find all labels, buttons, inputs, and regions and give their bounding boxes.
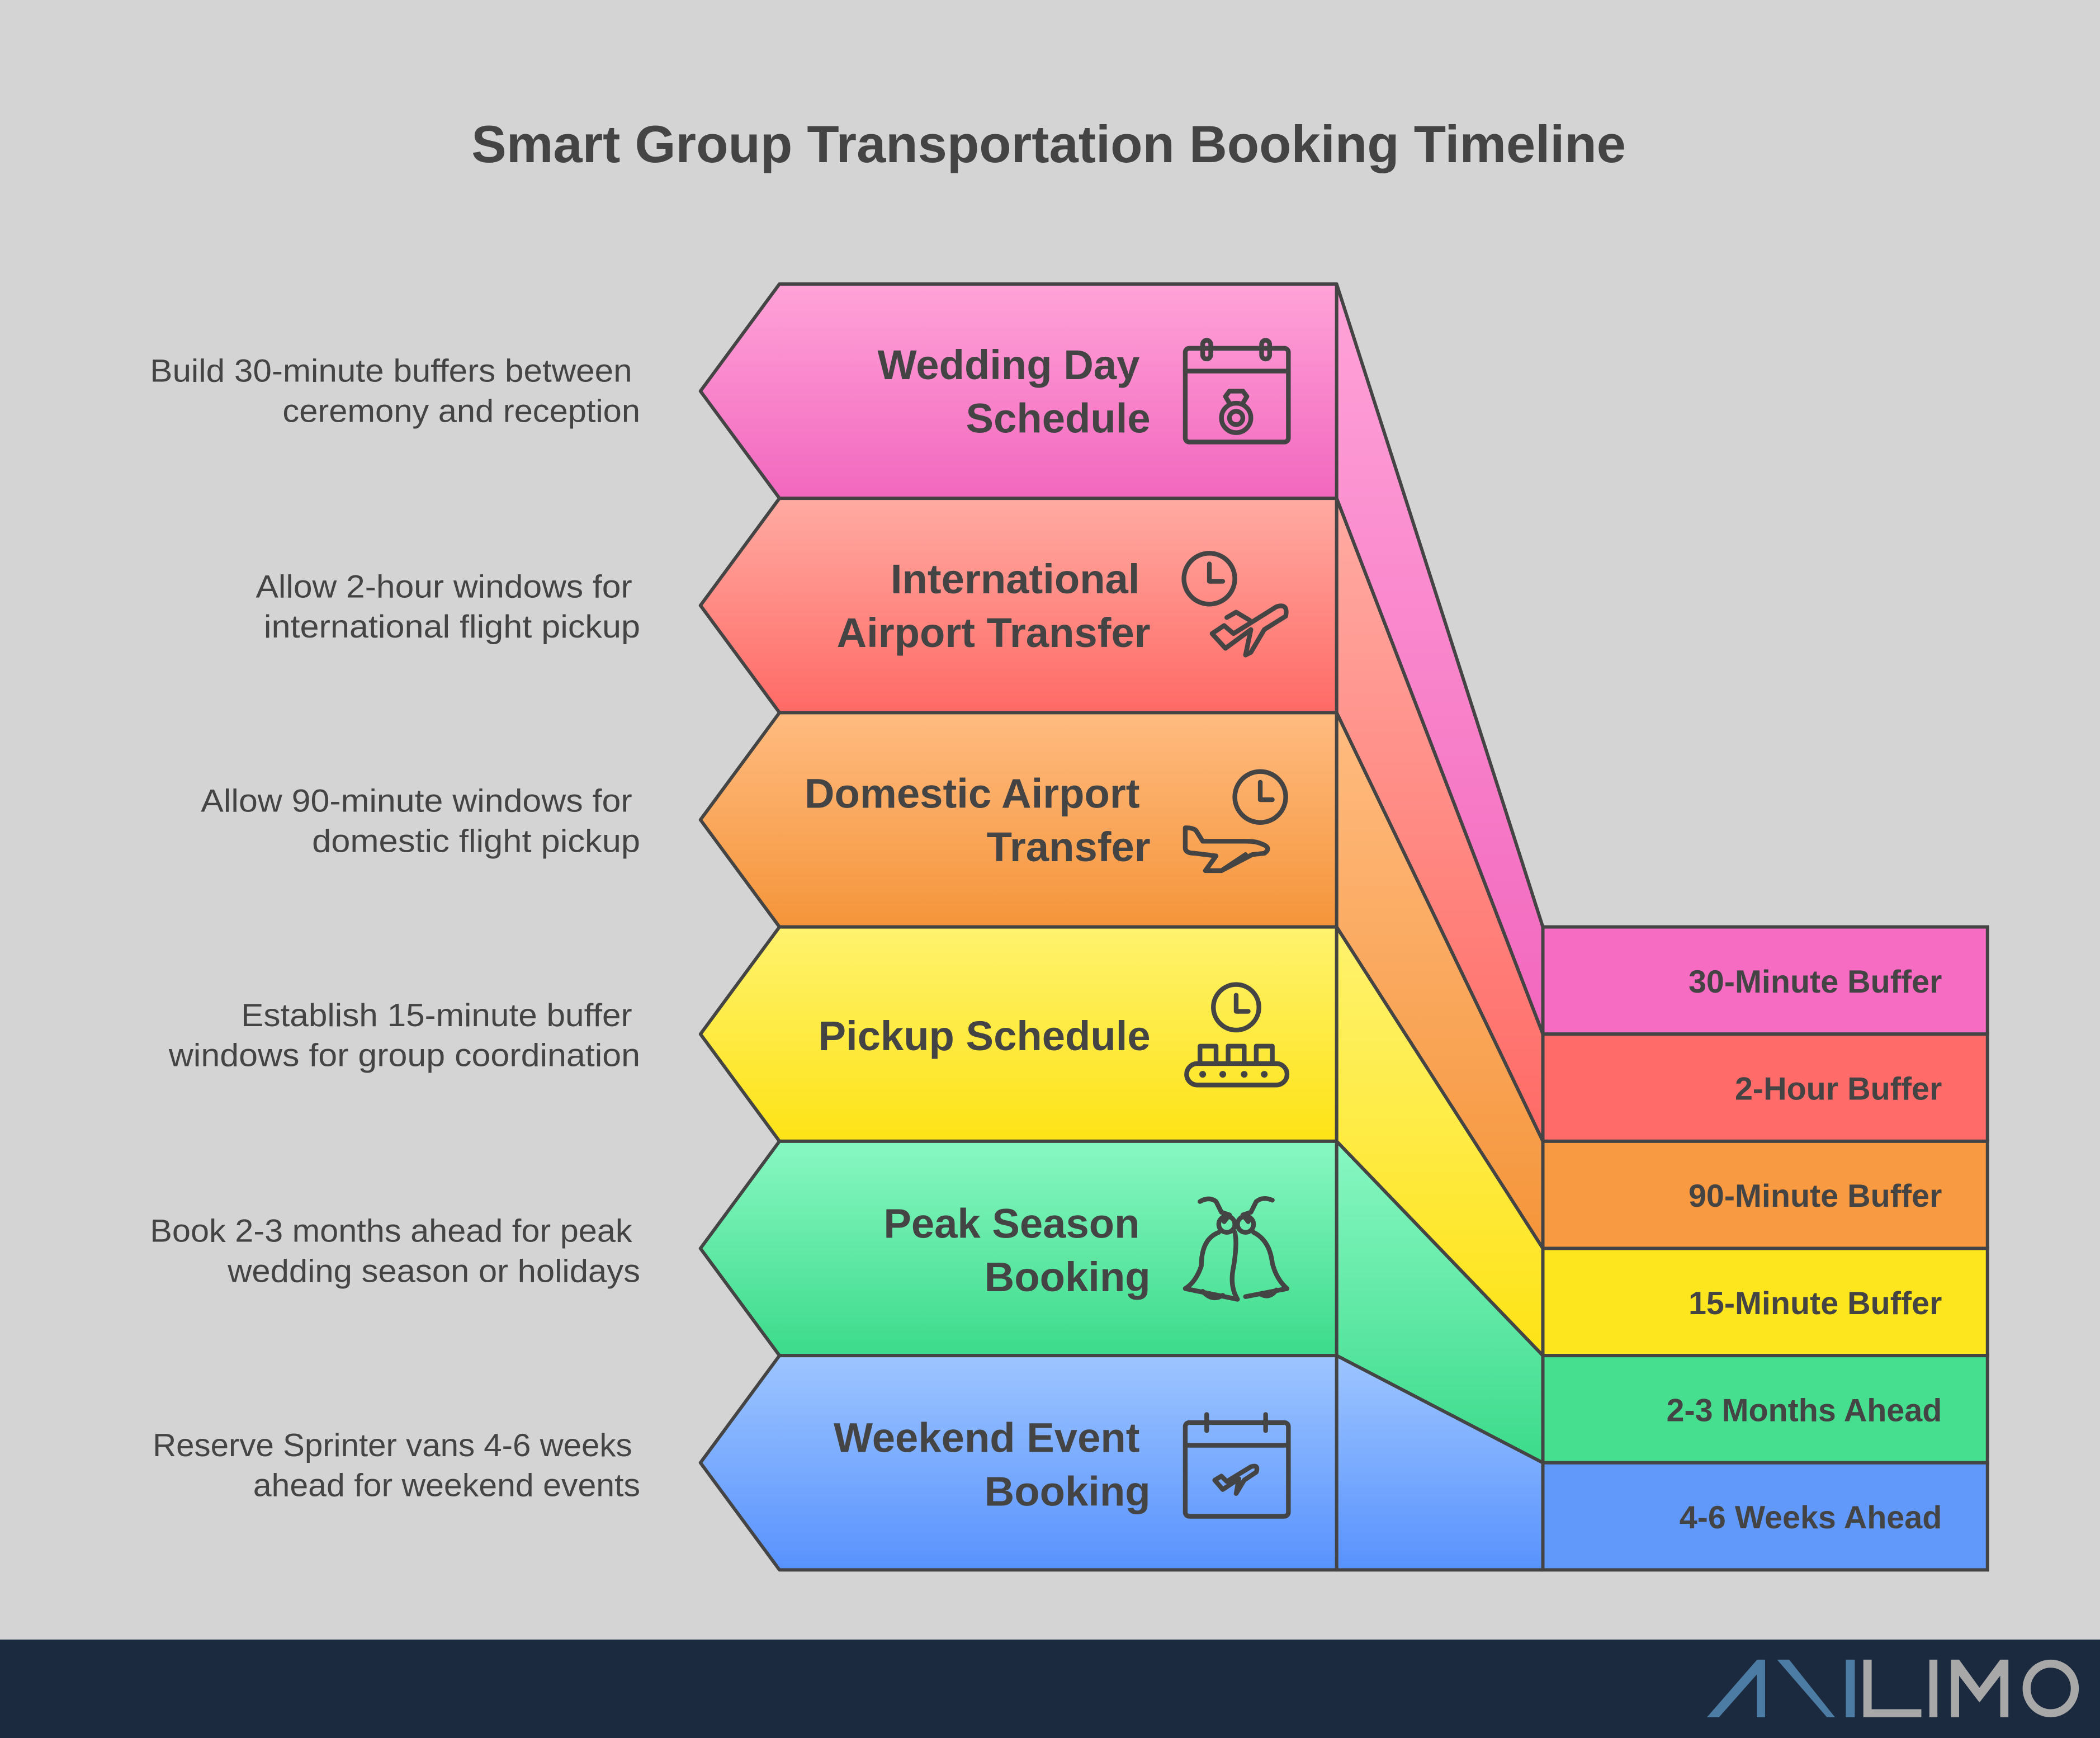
description: pickup: windows for group coordination bbox=[168, 1038, 640, 1074]
box: 2-Hour Buffer: 2-Hour Buffer bbox=[1735, 1071, 1942, 1107]
arrow: Pickup Schedule bbox=[701, 927, 1337, 1141]
connector facets bbox=[1337, 284, 1543, 1570]
description: international: Allow 2-hour windows for bbox=[256, 569, 632, 604]
arrow: Wedding Day Schedule: Schedule bbox=[966, 395, 1151, 442]
box: 30-Minute Buffer bbox=[1543, 927, 1988, 1034]
description: peak season: Book 2-3 months ahead for peak bbox=[150, 1213, 632, 1249]
buffer boxes bbox=[1543, 927, 1988, 1570]
arrow: Wedding Day Schedule: Wedding Day bbox=[878, 342, 1139, 388]
description: peak season bbox=[150, 1213, 640, 1289]
arrow: Weekend Event Booking: Booking bbox=[985, 1468, 1151, 1514]
description: weekend: Reserve Sprinter vans 4-6 weeks bbox=[153, 1428, 632, 1463]
box: 4-6 Weeks Ahead: 4-6 Weeks Ahead bbox=[1680, 1500, 1942, 1536]
arrow: Peak Season Booking bbox=[701, 1141, 1337, 1356]
arrow: Peak Season Booking: Peak Season bbox=[883, 1200, 1139, 1246]
icon: calendar with ring bbox=[1185, 340, 1288, 442]
arrow: International Airport Transfer: Airport Transfer bbox=[837, 610, 1151, 656]
icon: calendar with plane bbox=[1185, 1415, 1288, 1517]
logo: AVILIMO bbox=[1707, 1660, 2075, 1717]
description: weekend bbox=[153, 1428, 640, 1504]
description: domestic: domestic flight pickup bbox=[312, 823, 640, 859]
arrow: Domestic Airport Transfer: Domestic Airport bbox=[805, 770, 1139, 816]
footer bar bbox=[0, 1640, 2100, 1738]
arrow: Weekend Event Booking: Weekend Event bbox=[834, 1415, 1139, 1461]
description: wedding: ceremony and reception bbox=[282, 394, 640, 429]
icon: bells bbox=[1185, 1198, 1287, 1300]
description: pickup bbox=[168, 998, 640, 1074]
box: 2-Hour Buffer bbox=[1543, 1034, 1988, 1141]
arrow: Pickup Schedule: Pickup Schedule bbox=[818, 1013, 1151, 1059]
box: 2-3 Months Ahead bbox=[1543, 1356, 1988, 1463]
arrow: Wedding Day Schedule bbox=[701, 284, 1337, 498]
box: 4-6 Weeks Ahead bbox=[1543, 1463, 1988, 1570]
arrow: Peak Season Booking: Booking bbox=[985, 1254, 1151, 1300]
arrow: International Airport Transfer: International bbox=[891, 556, 1139, 602]
arrow: Domestic Airport Transfer bbox=[701, 712, 1337, 927]
description: peak season: wedding season or holidays bbox=[227, 1253, 640, 1289]
box: 15-Minute Buffer: 15-Minute Buffer bbox=[1688, 1286, 1942, 1321]
icon: clock and conveyor bbox=[1186, 985, 1287, 1085]
arrow: Weekend Event Booking bbox=[701, 1356, 1337, 1570]
arrow: Domestic Airport Transfer: Transfer bbox=[987, 824, 1151, 870]
description: domestic: Allow 90-minute windows for bbox=[201, 783, 632, 819]
title: Smart Group Transportation Booking Timeline bbox=[471, 115, 1626, 173]
icon: clock and plane bbox=[1185, 772, 1286, 871]
arrow: International Airport Transfer bbox=[701, 498, 1337, 712]
description: pickup: Establish 15-minute buffer bbox=[241, 998, 632, 1033]
description: international: international flight pickup bbox=[264, 609, 640, 645]
description: domestic bbox=[201, 783, 640, 859]
description: international bbox=[256, 569, 640, 645]
description: wedding bbox=[150, 353, 640, 429]
description: wedding: Build 30-minute buffers between bbox=[150, 353, 632, 389]
box: 15-Minute Buffer bbox=[1543, 1248, 1988, 1356]
box: 2-3 Months Ahead: 2-3 Months Ahead bbox=[1667, 1392, 1942, 1428]
box: 30-Minute Buffer: 30-Minute Buffer bbox=[1688, 964, 1942, 1000]
description: weekend: ahead for weekend events bbox=[253, 1468, 640, 1504]
box: 90-Minute Buffer: 90-Minute Buffer bbox=[1688, 1178, 1942, 1214]
icon: clock and plane bbox=[1184, 553, 1286, 655]
box: 90-Minute Buffer bbox=[1543, 1141, 1988, 1248]
